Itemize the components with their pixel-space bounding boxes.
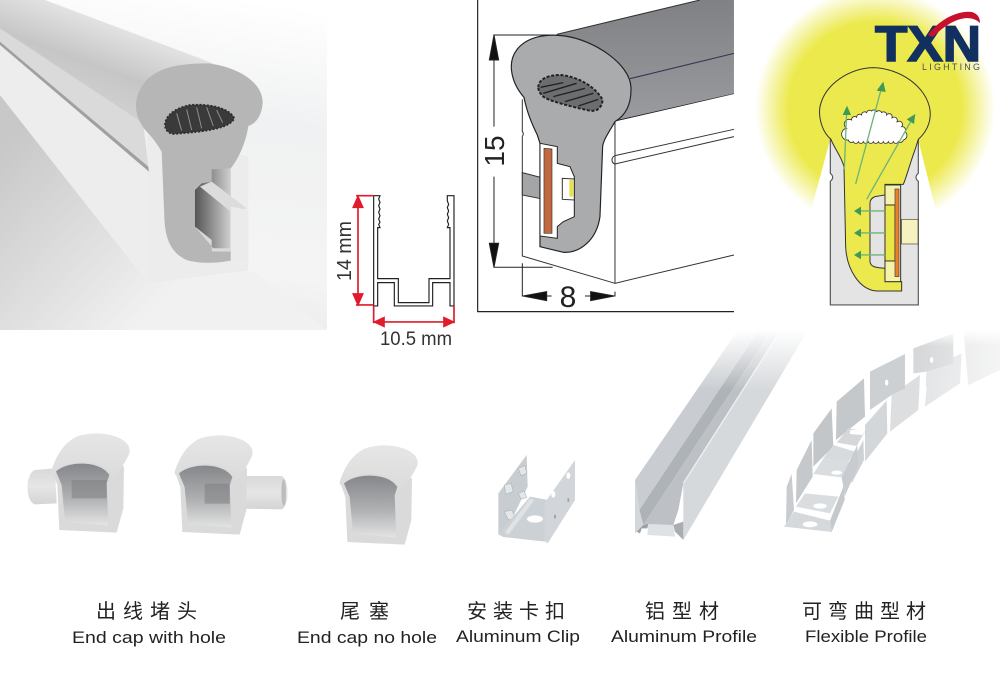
body side bbox=[0, 43, 148, 283]
housing bbox=[830, 140, 918, 305]
cap body bbox=[53, 455, 124, 533]
cap body bbox=[341, 467, 412, 545]
side cable spout bbox=[241, 476, 288, 509]
front wall bbox=[544, 460, 575, 543]
cast shadow bbox=[0, 95, 327, 330]
caption: aluminum clip: Aluminum Clip bbox=[456, 627, 580, 646]
panel: end cap no hole bbox=[340, 445, 418, 545]
tube top bbox=[0, 0, 213, 125]
fade overlays for profiles bbox=[700, 330, 1000, 410]
shoulder band and groove bbox=[0, 28, 148, 167]
segment 5 bbox=[870, 354, 905, 410]
green light arrows bbox=[843, 82, 915, 259]
height dimension 15 bbox=[489, 35, 553, 267]
caption: end cap with hole: End cap with hole bbox=[72, 628, 226, 647]
caption: end cap with hole: 出线堵头 bbox=[96, 600, 204, 623]
housing front bbox=[522, 99, 615, 283]
yellow glow bbox=[755, 0, 995, 228]
cut face with channel bbox=[136, 63, 263, 263]
profile end face bbox=[635, 480, 643, 533]
label: 14 mm: 14 mm bbox=[334, 221, 356, 281]
U channel outline bbox=[374, 196, 454, 306]
segment 6 bbox=[913, 333, 953, 373]
cap hood bbox=[175, 435, 253, 484]
caption: aluminum profile: Aluminum Profile bbox=[611, 627, 757, 646]
side cable spout bbox=[27, 468, 57, 504]
caption: aluminum clip bbox=[456, 600, 580, 646]
red height dimension bbox=[353, 196, 374, 305]
cap hood bbox=[340, 445, 418, 494]
logo tagline: LIGHTING bbox=[922, 62, 980, 72]
caption: aluminum clip: 安装卡扣 bbox=[467, 600, 571, 623]
cap hood bbox=[52, 433, 130, 482]
label: 8: 8 bbox=[560, 281, 576, 314]
caption: flexible profile: 可弯曲型材 bbox=[802, 600, 932, 623]
label: 10.5 mm: 10.5 mm bbox=[380, 329, 452, 350]
panel: flexible profile bbox=[784, 330, 1000, 532]
panel: end cap with hole (left) bbox=[27, 433, 130, 533]
LED cavity bbox=[540, 143, 574, 238]
caption: flexible profile: Flexible Profile bbox=[805, 627, 927, 646]
cut face bbox=[511, 35, 631, 252]
body front bbox=[147, 132, 248, 283]
cap interior bbox=[56, 464, 109, 526]
LED channel bbox=[195, 168, 231, 261]
mounting hole bbox=[527, 515, 543, 523]
label: 15: 15 bbox=[479, 135, 510, 167]
white diffuser bbox=[842, 110, 907, 143]
panel: light path diagram bbox=[755, 0, 995, 320]
clip floor bbox=[498, 497, 548, 542]
segment 7 bbox=[963, 330, 1000, 385]
panel: 3D silicone profile render bbox=[0, 0, 327, 330]
caption: end cap no hole: 尾塞 bbox=[340, 600, 398, 623]
panel: profile section drawing with dimensions bbox=[478, 0, 734, 312]
cable bbox=[522, 173, 544, 199]
panel: aluminum profile bbox=[635, 330, 808, 540]
panel: aluminium channel dimension drawing bbox=[353, 196, 454, 326]
width dimension 8 bbox=[522, 263, 615, 301]
diffuser slot bbox=[538, 75, 603, 111]
frame bbox=[478, 0, 734, 312]
yellow lens bbox=[820, 68, 930, 291]
segment 4 bbox=[836, 378, 865, 440]
caption: end cap with hole bbox=[72, 600, 226, 647]
caption: aluminum profile: 铝型材 bbox=[645, 600, 726, 623]
caption: aluminum profile bbox=[611, 600, 757, 646]
back wall bbox=[498, 455, 528, 534]
wedge mask bbox=[807, 140, 940, 320]
red swoosh bbox=[928, 12, 980, 37]
caption: end cap no hole: End cap no hole bbox=[297, 628, 437, 647]
caption: flexible profile bbox=[802, 600, 932, 646]
diffuser slot bbox=[165, 105, 234, 134]
panel: aluminum clip bbox=[498, 455, 575, 543]
tube body bbox=[557, 0, 734, 121]
cap body bbox=[176, 457, 247, 535]
segment 3 bbox=[813, 408, 833, 467]
cap interior bbox=[344, 476, 397, 538]
red width dimension bbox=[374, 306, 454, 326]
segment 1 bbox=[786, 474, 794, 525]
clip tabs bbox=[504, 466, 527, 520]
PCB carrier bbox=[885, 185, 901, 282]
caption: end cap no hole bbox=[297, 600, 437, 647]
cap interior bbox=[179, 466, 232, 528]
logo: TXN Lighting: TXN bbox=[875, 16, 981, 72]
housing side bbox=[615, 94, 734, 283]
panel: end cap with hole (right) bbox=[175, 435, 288, 535]
segment 2 bbox=[796, 440, 813, 503]
